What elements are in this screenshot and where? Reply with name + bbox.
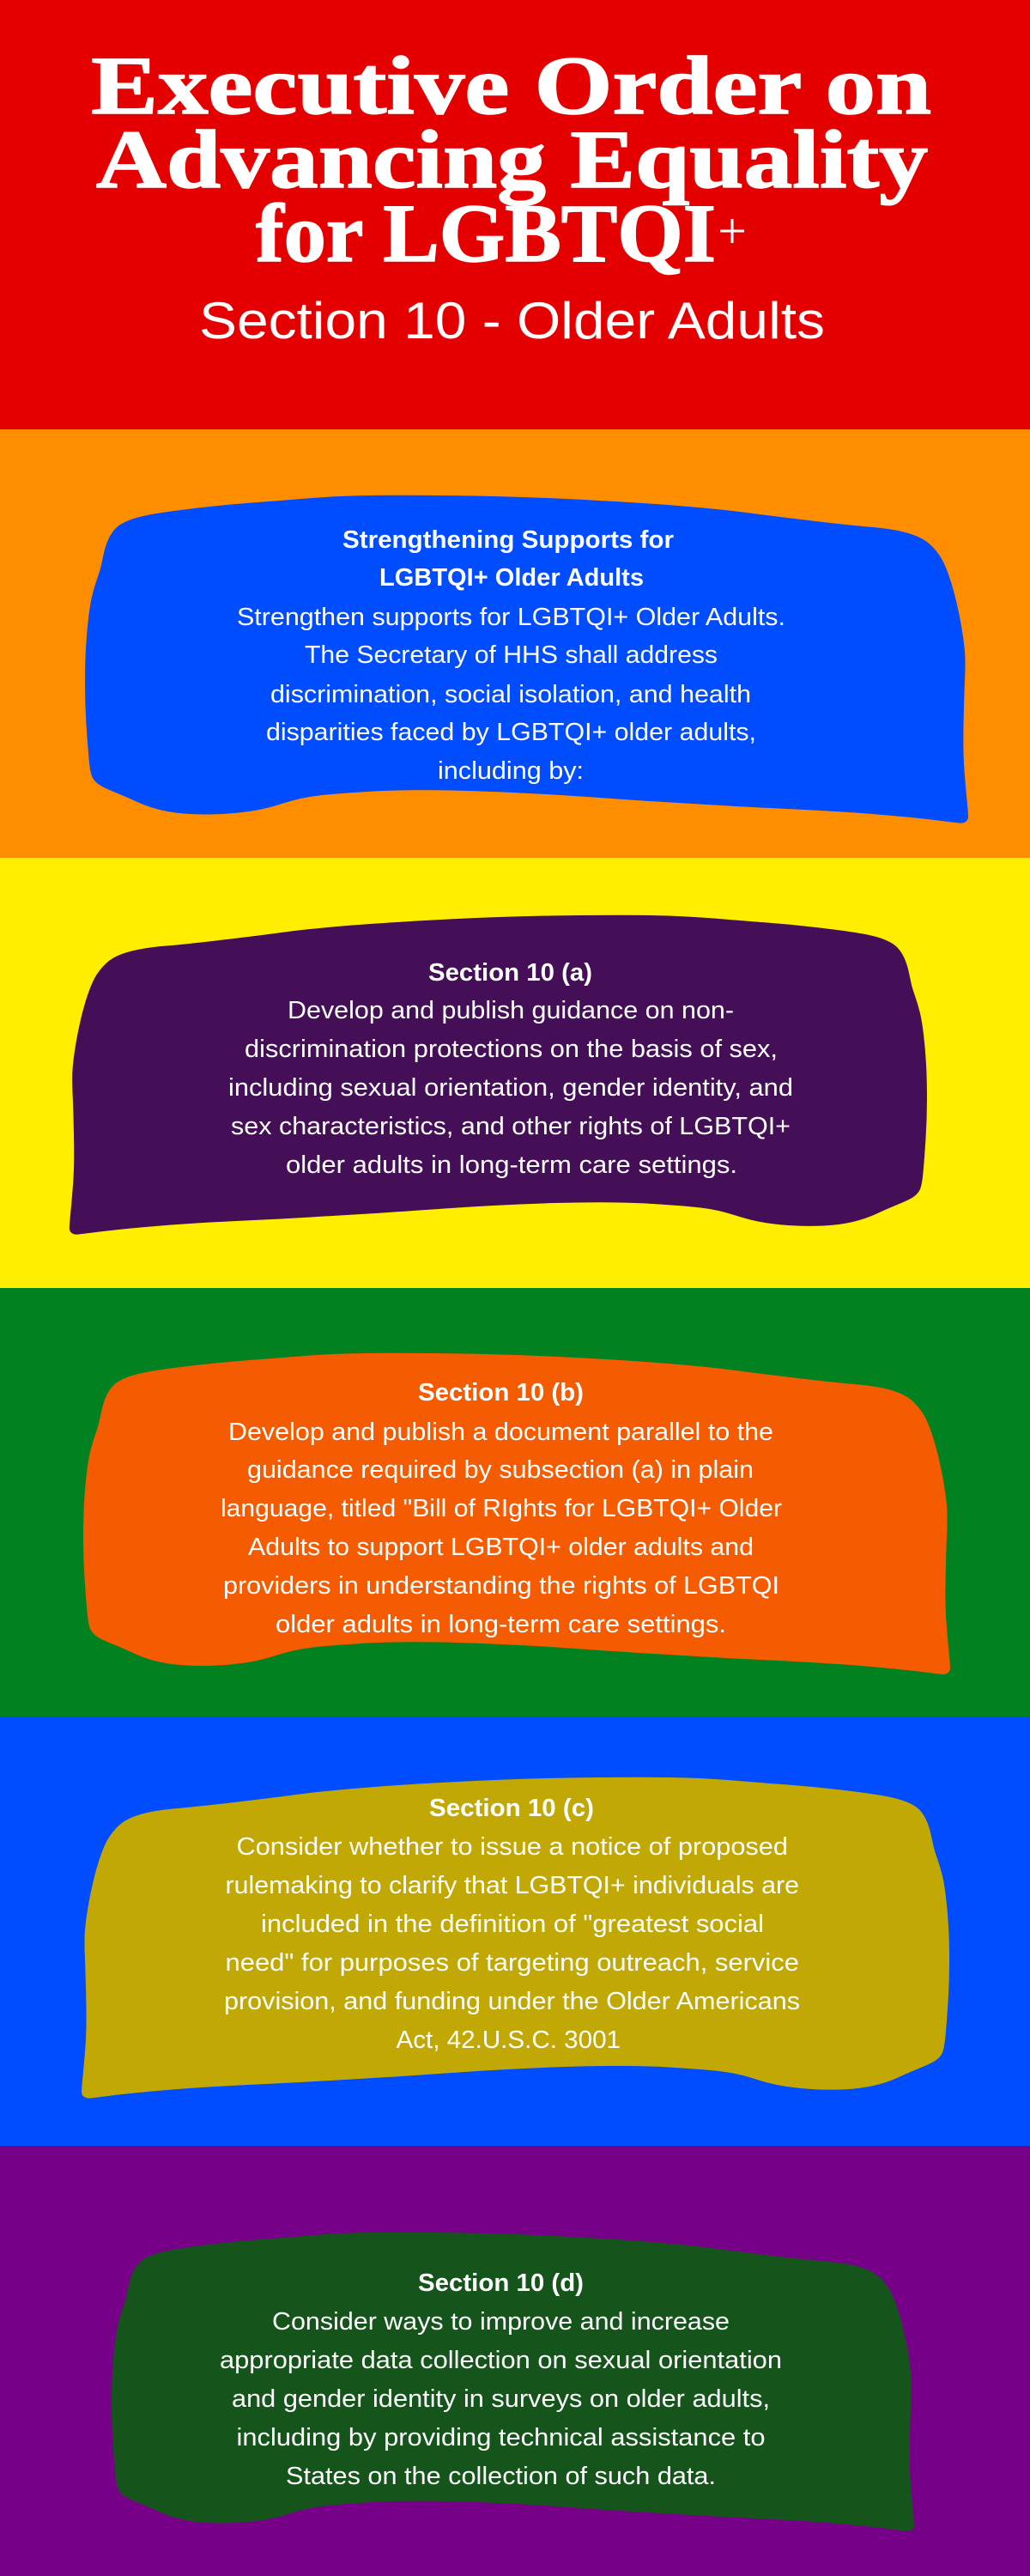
- title: for LGBTQI: [256, 187, 716, 279]
- text block: Adults to support LGBTQI+ older adults and: [248, 1534, 754, 1561]
- title: Executive Order on: [91, 39, 931, 131]
- text block: sex characteristics, and other rights of LGBTQI+: [231, 1113, 791, 1140]
- text block: language, titled "Bill of RIghts for LGBTQI+ Older: [221, 1495, 782, 1522]
- text block: disparities faced by LGBTQI+ older adults,: [266, 719, 756, 746]
- heading: Strengthening Supports for: [342, 526, 674, 554]
- text block: [228, 997, 793, 1179]
- blob: orange: [83, 1353, 950, 1674]
- text block: providers in understanding the rights of LGBTQI: [223, 1572, 779, 1600]
- text block: discrimination, social isolation, and health: [270, 681, 751, 708]
- title: Advancing Equality: [96, 113, 928, 205]
- text block: The Secretary of HHS shall address: [305, 641, 718, 669]
- text block: guidance required by subsection (a) in plain: [247, 1456, 754, 1484]
- text block: [220, 2308, 782, 2490]
- panel: section 10 (d): [0, 2146, 1030, 2576]
- text block: older adults in long-term care settings.: [286, 1151, 737, 1179]
- blob: blue: [85, 495, 968, 823]
- text block: and gender identity in surveys on older adults,: [232, 2385, 770, 2413]
- text block: Act, 42.U.S.C. 3001: [397, 2026, 621, 2054]
- text block: provision, and funding under the Older Americans: [224, 1988, 800, 2015]
- text block: rulemaking to clarify that LGBTQI+ individuals are: [225, 1872, 799, 1899]
- text block: including by providing technical assistance to: [237, 2424, 766, 2451]
- panel: section 10 (c): [0, 1716, 1030, 2146]
- text block: [237, 604, 785, 785]
- title: [91, 39, 931, 279]
- text block: appropriate data collection on sexual orientation: [220, 2347, 782, 2374]
- text block: older adults in long-term care settings.: [276, 1611, 726, 1638]
- text block: discrimination protections on the basis of sex,: [245, 1036, 778, 1063]
- text block: Strengthen supports for LGBTQI+ Older Adults.: [237, 604, 785, 631]
- subtitle: Section 10 - Older Adults: [199, 292, 825, 349]
- heading: [342, 526, 674, 592]
- blob: dark purple: [70, 915, 927, 1235]
- blob: olive: [82, 1777, 949, 2099]
- heading: Section 10 (d): [418, 2269, 584, 2297]
- panel: section 10 (b): [0, 1288, 1030, 1716]
- text block: States on the collection of such data.: [286, 2463, 716, 2490]
- text block: including sexual orientation, gender identity, and: [228, 1074, 793, 1102]
- text block: Consider whether to issue a notice of proposed: [237, 1833, 788, 1861]
- heading: Section 10 (a): [428, 959, 592, 987]
- blob: dark green: [112, 2233, 914, 2531]
- text block: [221, 1419, 782, 1638]
- panel: header: [0, 0, 1030, 429]
- panel: strengthening supports: [0, 429, 1030, 858]
- text block: [224, 1833, 800, 2054]
- text block: including by:: [438, 757, 584, 785]
- heading: LGBTQI+ Older Adults: [379, 564, 644, 592]
- title: +: [718, 203, 747, 259]
- text block: Consider ways to improve and increase: [272, 2308, 730, 2336]
- text block: Develop and publish guidance on non-: [288, 997, 734, 1024]
- heading: Section 10 (c): [429, 1795, 594, 1822]
- text block: Develop and publish a document parallel to the: [228, 1419, 773, 1446]
- text block: included in the definition of "greatest social: [261, 1911, 764, 1938]
- text block: need" for purposes of targeting outreach, service: [225, 1949, 799, 1977]
- heading: Section 10 (b): [418, 1379, 584, 1406]
- panel: section 10 (a): [0, 858, 1030, 1288]
